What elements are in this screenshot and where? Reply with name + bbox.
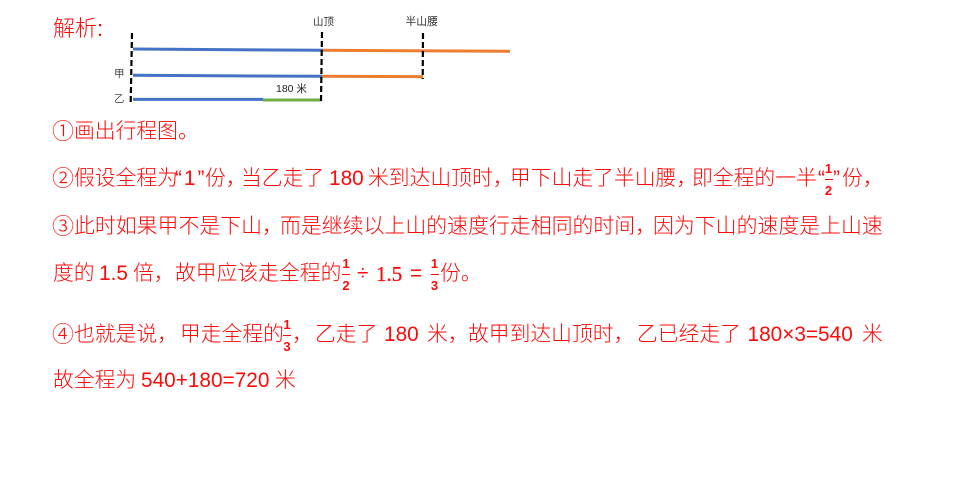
step 3 text, second line: 1.5: [99, 262, 128, 285]
step 3 text, second line: 1.5: [376, 262, 402, 286]
step 3 text, first line: 此时如果甲不是下山，: [74, 215, 283, 238]
step 3 text, second line: 份。: [440, 262, 482, 285]
step 3 text, first line: [52, 214, 883, 239]
step 3 text, second line: =: [410, 262, 422, 285]
step 4 text, second line: 故全程为: [53, 369, 136, 392]
step 3 text, first line: ③: [52, 214, 74, 239]
line: top full route uphill: [133, 49, 323, 50]
step 4 text, first line: 故甲到达山顶时，: [468, 323, 634, 346]
step 2 text: 假设全程为: [74, 167, 178, 190]
fraction: one half: 1: [342, 256, 350, 270]
line: Jia downhill: [322, 75, 423, 78]
line: Jia uphill: [133, 75, 322, 76]
step 3 text, second line: 倍，: [133, 262, 175, 285]
fraction: one third: 3: [431, 278, 438, 292]
step 4 text, second line: 540+180=720: [141, 369, 269, 392]
step 2 text: 甲下山走了半山腰，: [510, 167, 697, 190]
fraction: one half: 2: [342, 278, 350, 292]
step 4 text, second line: 米: [275, 369, 296, 392]
step 2 text: 份，: [842, 167, 884, 190]
step 4 text, first line: 乙走了: [315, 323, 377, 346]
step 4 text, first line: ④: [52, 322, 74, 347]
label: Yi: 乙: [114, 93, 124, 105]
step 2 text: 180: [329, 167, 364, 190]
step 2 text: 份，: [205, 167, 247, 190]
step 4 text, first line: 180×3=540: [748, 323, 853, 346]
step 3 text, first line: 因为下山的速度是上山速: [653, 215, 883, 238]
step 4 text, first line: [52, 316, 883, 354]
dashed line: start: [131, 33, 132, 103]
step 4 text, first line: ，: [292, 323, 313, 346]
dashed line: halfway: [422, 33, 424, 79]
step 4 text, second line: [53, 369, 296, 392]
step 2 text: 即全程的一半: [692, 167, 817, 190]
label: halfway up: 半山腰: [406, 14, 438, 28]
step 4 text, first line: 甲走全程的: [180, 323, 284, 346]
dashed line: summit: [321, 32, 322, 102]
step 2 text: 米到达山顶时，: [368, 167, 514, 190]
fraction: one third: [431, 256, 439, 292]
fraction: one third: 1: [283, 316, 291, 332]
fraction: one third: 1: [431, 256, 438, 270]
step 4 text, first line: 乙已经走了: [637, 323, 741, 346]
step 2 text: “: [818, 167, 825, 190]
step 3 text, second line: 故甲应该走全程的: [175, 262, 341, 285]
step 2 text: ”: [833, 167, 840, 190]
label: Jia: 甲: [114, 68, 124, 80]
step 3 text, second line: [53, 256, 482, 292]
fraction: one half: [342, 256, 350, 292]
line: Yi walked: [133, 98, 263, 101]
step 4 text, first line: 米: [862, 323, 883, 346]
step 3 text, second line: 度的: [53, 262, 95, 285]
fraction: one third: [283, 316, 291, 354]
step 4 text, first line: 180: [384, 323, 419, 346]
step 4 text, first line: 米，: [427, 323, 469, 346]
line: Yi remaining 180 m: [263, 98, 321, 102]
step 1 text: 画出行程图。: [74, 120, 199, 143]
fraction: one half: [825, 160, 833, 198]
fraction: one third: 3: [283, 338, 291, 354]
fraction: one half: 2: [825, 182, 832, 198]
step 3 text, first line: 而是继续以上山的速度行走相同的时间，: [280, 215, 656, 238]
label: 180 m: 180 米: [276, 82, 307, 95]
step 2 text: ②: [52, 166, 74, 191]
step 1 text: ①: [52, 119, 74, 144]
heading: analysis: 解析:: [53, 16, 103, 41]
label: summit: 山顶: [313, 16, 334, 28]
step 4 text, first line: 也就是说，: [74, 323, 178, 346]
diagram: journey line chart: [114, 14, 510, 105]
step 2 text: [52, 160, 884, 198]
step 2 text: “1”: [175, 167, 206, 190]
step 3 text, second line: ÷: [357, 262, 368, 285]
step 2 text: 当乙走了: [241, 167, 324, 190]
fraction: one half: 1: [825, 160, 832, 176]
line: top full route downhill: [323, 50, 510, 51]
